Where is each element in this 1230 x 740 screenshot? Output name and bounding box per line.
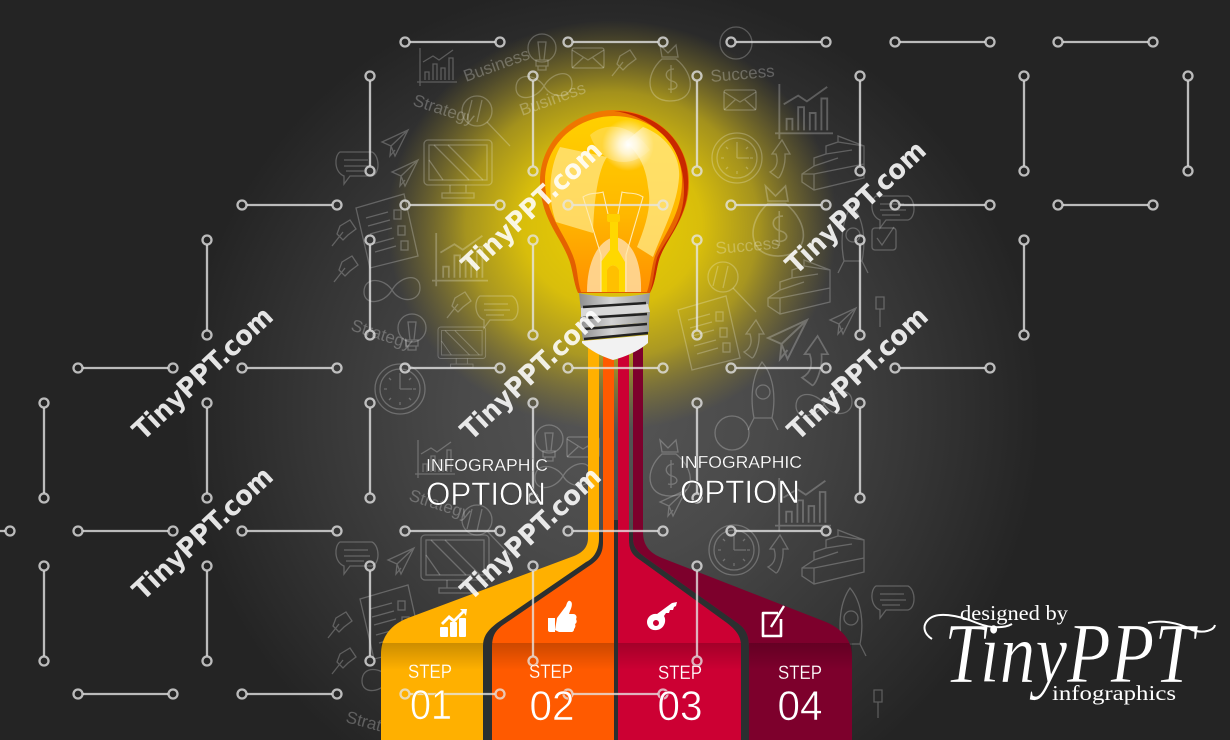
step 02 label: 02 — [530, 682, 574, 729]
ribbons: four coloured steps rising to the bulb — [381, 340, 852, 740]
watermarks: TinyPPT.com — [780, 135, 933, 280]
step 03 label: 03 — [658, 682, 702, 729]
bulb glow — [387, 20, 837, 430]
option heading left — [426, 455, 548, 512]
step 01 label: 01 — [410, 681, 452, 728]
ribbon 3: red — [618, 340, 741, 740]
light bulb — [540, 110, 689, 360]
step 03 label: STEP — [658, 662, 702, 684]
logo: designed by TinyPPT infographics: designed by — [960, 601, 1068, 625]
ribbon 1: yellow — [381, 340, 599, 740]
step 01 label: STEP — [408, 661, 452, 683]
step 03 label — [658, 662, 702, 729]
option heading right: INFOGRAPHIC — [680, 452, 802, 472]
watermarks: TinyPPT.com — [127, 301, 280, 446]
icon: growth chart — [440, 609, 467, 637]
icon: thumbs up — [548, 601, 577, 632]
step 02 label: STEP — [529, 661, 573, 683]
doodle background: Business — [517, 78, 588, 120]
doodle background: Strategy — [407, 486, 473, 524]
doodle background: Strategy — [411, 91, 477, 129]
doodle background — [328, 27, 914, 740]
step 02 label — [529, 661, 574, 729]
option heading right: OPTION — [680, 474, 800, 510]
watermarks: TinyPPT.com — [455, 461, 608, 606]
ribbon 4: maroon — [633, 340, 852, 740]
doodle background: Success — [715, 233, 780, 258]
ribbon shadow band — [381, 643, 852, 670]
bulb screw base — [579, 293, 650, 360]
option heading right — [680, 452, 802, 510]
icon: edit square — [763, 606, 784, 636]
watermarks — [127, 135, 935, 606]
watermarks: TinyPPT.com — [455, 301, 608, 446]
option heading left: INFOGRAPHIC — [426, 455, 548, 475]
icon: key — [647, 602, 677, 630]
ribbon 2: orange — [492, 340, 614, 740]
bulb glass — [540, 110, 689, 293]
step 04 label: STEP — [778, 662, 822, 684]
watermarks: TinyPPT.com — [127, 461, 280, 606]
doodle background: Strategy — [349, 316, 415, 354]
step 04 label: 04 — [778, 682, 822, 729]
option heading left: OPTION — [426, 476, 546, 512]
doodle background: Business — [461, 44, 532, 86]
watermarks: TinyPPT.com — [782, 301, 935, 446]
doodle background: Success — [710, 61, 775, 86]
step 04 label — [778, 662, 822, 729]
ribbon dark gaps — [483, 520, 749, 740]
logo: designed by TinyPPT infographics: infographics — [1052, 681, 1176, 705]
watermarks: TinyPPT.com — [456, 135, 609, 280]
step 01 label — [408, 661, 452, 728]
